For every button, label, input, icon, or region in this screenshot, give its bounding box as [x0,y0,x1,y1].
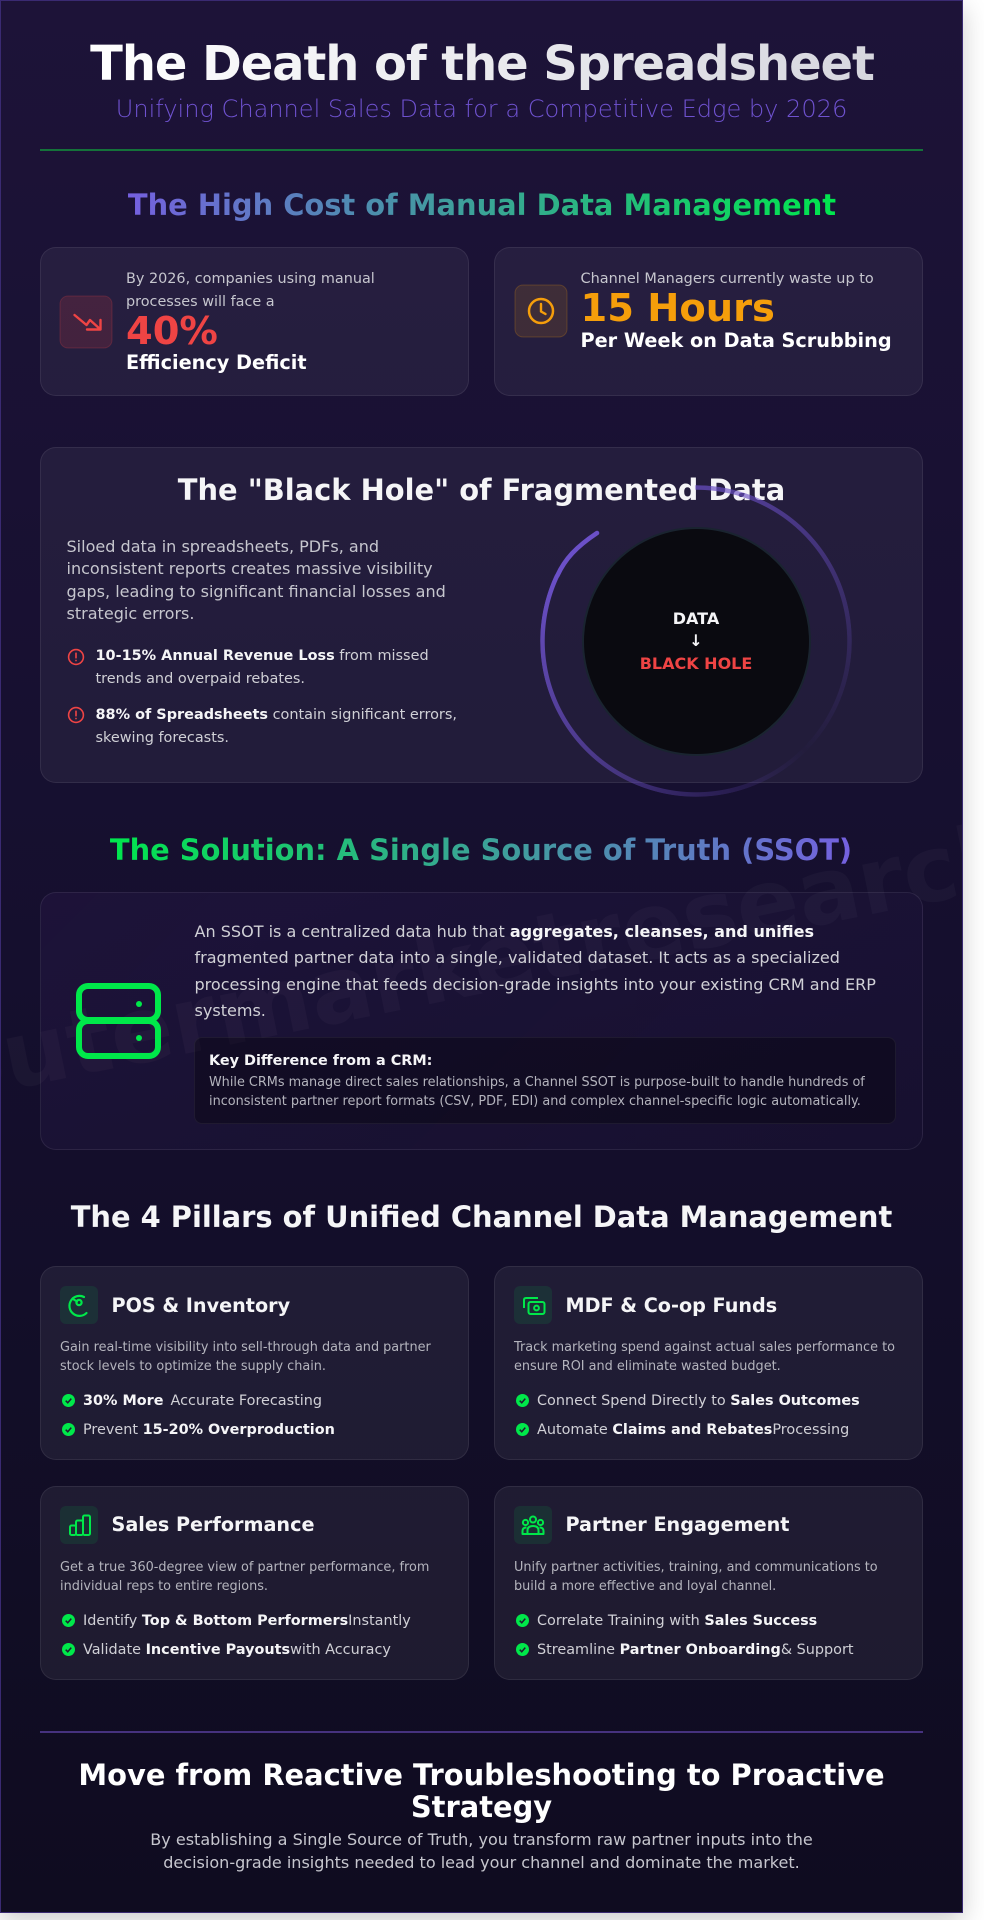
pillar description: stock levels to optimize the supply chain. [60,1359,326,1374]
icon: money [514,1286,552,1324]
pillar description [514,1560,878,1594]
body text: processing engine that feeds decision-grade insights into your existing CRM and ERP [194,975,876,994]
icon: check [62,1643,75,1656]
benefit: Prevent 15-20% Overproduction [83,1422,335,1438]
benefit: Identify Top & Bottom PerformersInstantly [83,1613,411,1629]
intro text: processes will face a [126,294,275,310]
pillar description [60,1560,429,1594]
icon: trending down [60,296,112,348]
description: strategic errors. [66,604,194,623]
intro text: Channel Managers currently waste up to [580,270,874,286]
intro text [126,270,375,310]
subtitle: Unifying Channel Sales Data for a Competitive Edge by 2026 [116,95,847,123]
pillar title: Partner Engagement [566,1513,789,1536]
stat bullet: revenue loss: trends and overpaid rebates. [96,671,305,687]
icon: alert [68,706,84,724]
pillar title: MDF & Co-op Funds [566,1294,777,1316]
callout title: Key Difference from a CRM: [209,1053,432,1069]
swirling ring [540,485,852,797]
disc label: DATA [673,609,719,628]
diagram: black hole [540,485,852,797]
description: Siloed data in spreadsheets, PDFs, and [66,536,379,556]
benefit: Validate Incentive Payoutswith Accuracy [83,1642,391,1658]
pillar title: POS & Inventory [112,1294,290,1316]
icon: check [62,1394,75,1407]
pillar title: Sales Performance [112,1513,314,1536]
benefit: Connect Spend Directly to Sales Outcomes [537,1393,860,1409]
panel: Partner Engagement [494,1486,923,1680]
callout: key difference [194,1037,896,1124]
black hole disc [582,526,810,756]
stat bullet: revenue loss [96,648,429,687]
panel: efficiency deficit stat [40,247,469,396]
benefit: Streamline Partner Onboarding& Support [537,1642,854,1658]
stat bullet: spreadsheet errors [96,706,457,746]
pillar description: build a more effective and loyal channel. [514,1579,776,1594]
body text [194,922,876,1020]
stat: 40%: 40% [126,309,218,354]
panel: SSOT explanation [40,892,923,1150]
icon: POS [60,1286,98,1324]
stat bullet: spreadsheet errors: 88% of Spreadsheets contain significant errors, [96,706,457,722]
panel: POS & Inventory [40,1266,469,1460]
pillar description: Gain real-time visibility into sell-through data and partner [60,1340,431,1355]
pillar description [514,1340,895,1374]
benefit: 30% More Accurate Forecasting [83,1393,322,1409]
pillar description [60,1340,431,1374]
icon: server [76,983,161,1059]
pillar description: ensure ROI and eliminate wasted budget. [514,1359,781,1374]
icon: bar chart [60,1506,98,1544]
icon: check [516,1423,529,1436]
callout text: While CRMs manage direct sales relationships, a Channel SSOT is purpose-built to handle hundreds of [209,1074,865,1090]
stat bullet: spreadsheet errors: skewing forecasts. [96,730,229,746]
pillar description: individual reps to entire regions. [60,1579,268,1594]
icon: check [516,1614,529,1627]
stat: 15 hours: 15 Hours [580,286,775,331]
closing text: By establishing a Single Source of Truth, you transform raw partner inputs into the [150,1830,813,1849]
heading: four pillars: The 4 Pillars of Unified Channel Data Management [71,1200,892,1234]
icon: check [62,1614,75,1627]
heading: The "Black Hole" of Fragmented Data [178,473,785,507]
icon: check [62,1423,75,1436]
description: gaps, leading to significant financial losses and [66,582,446,600]
panel: black hole [40,447,923,783]
callout text [209,1074,865,1109]
stat label: Efficiency Deficit [126,351,307,374]
benefit: Automate Claims and RebatesProcessing [537,1422,849,1438]
ring bright tip [555,530,600,578]
closing heading [78,1758,885,1824]
header divider [40,149,923,151]
pillar description: Track marketing spend against actual sales performance to [514,1340,895,1355]
closing text [150,1830,813,1872]
body text: fragmented partner data into a single, validated dataset. It acts as a specialized [194,948,840,967]
closing heading: Strategy [411,1790,552,1824]
heading: high cost: The High Cost of Manual Data Management [128,188,836,222]
callout text: inconsistent partner report formats (CSV, PDF, EDI) and complex channel-specific logic automatically. [209,1094,861,1109]
icon: people [514,1506,552,1544]
body text: systems. [194,1001,266,1020]
description [66,536,446,623]
stat bullet: revenue loss: 10-15% Annual Revenue Loss from missed [96,648,429,664]
description: inconsistent reports creates massive visibility [66,559,433,578]
title: The Death of the Spreadsheet [90,36,874,92]
closing heading: Move from Reactive Troubleshooting to Proactive [78,1758,885,1792]
heading: the solution: The Solution: A Single Source of Truth (SSOT) [110,833,852,867]
body text: An SSOT is a centralized data hub that aggregates, cleanses, and unifies [194,922,814,941]
disc label: BLACK HOLE [640,654,752,672]
stat label: Per Week on Data Scrubbing [580,329,892,352]
benefit: Correlate Training with Sales Success [537,1613,817,1629]
disc label [640,609,752,672]
icon: clock [514,284,568,338]
icon: check [516,1643,529,1656]
disc label: ↓ [689,631,703,650]
panel: Sales Performance [40,1486,469,1680]
panel: wasted hours stat [494,247,923,396]
icon: alert [68,648,84,666]
pillar description: Get a true 360-degree view of partner performance, from [60,1560,429,1575]
footer divider [40,1731,923,1733]
closing text: decision-grade insights needed to lead your channel and dominate the market. [163,1852,800,1872]
intro text: By 2026, companies using manual [126,270,375,286]
pillar description: Unify partner activities, training, and communications to [514,1560,878,1575]
panel: MDF & Co-op Funds [494,1266,923,1460]
icon: check [516,1394,529,1407]
